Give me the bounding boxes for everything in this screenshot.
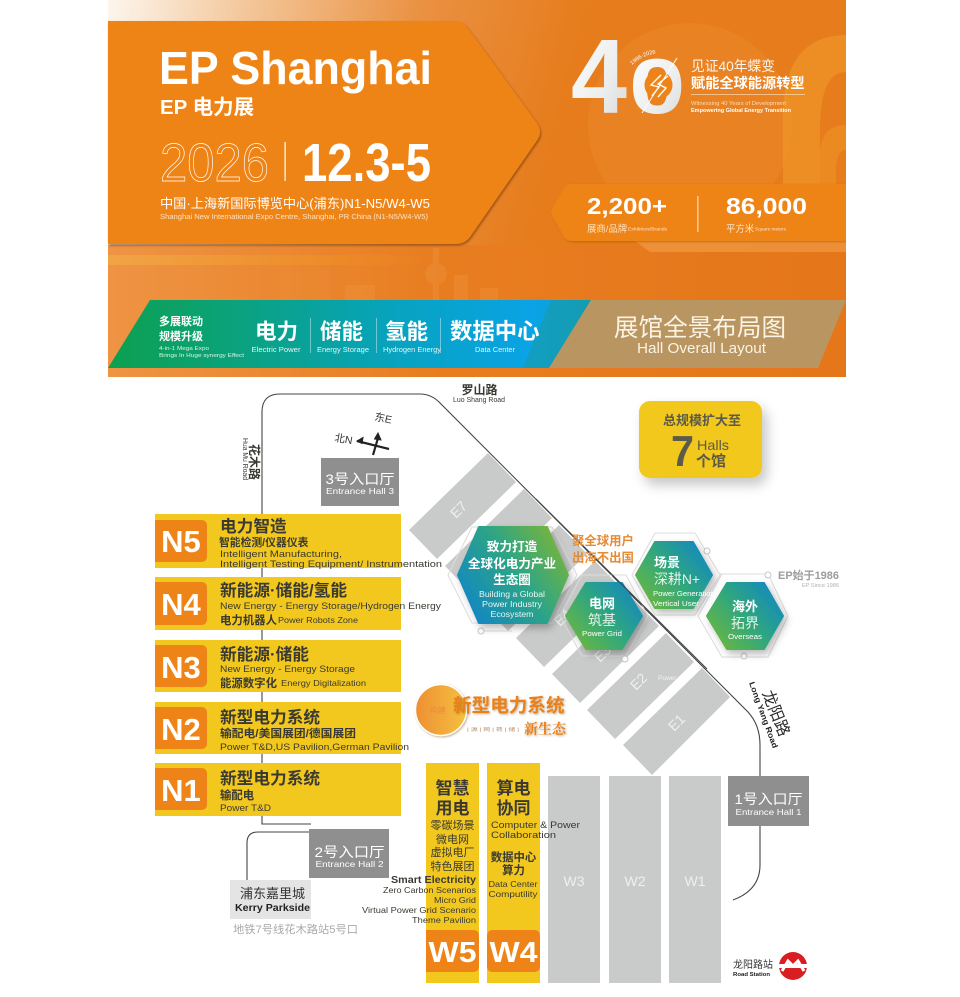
Kerry Parkside: [230, 880, 311, 919]
since 1986 note: EP始于1986: [778, 568, 839, 582]
date divider: [284, 142, 286, 181]
hexagon: global power ecosystem: 全球化电力产业: [468, 556, 556, 571]
hall N2: [155, 702, 409, 754]
logo zero: 0: [629, 43, 685, 130]
stat: exhibitors: Exhibitors/Brands: [628, 226, 668, 232]
expo: energy storage: Energy Storage: [317, 347, 369, 354]
halls W3 W2 W1: W3: [564, 873, 585, 889]
hall N4: [155, 577, 441, 630]
venue Chinese: 中国·上海新国际博览中心(浦东)N1-N5/W4-W5: [160, 196, 430, 211]
hall N3: N3: [161, 650, 201, 685]
compass: 北N: [333, 432, 353, 447]
hall W5: Theme Pavilion: [412, 915, 476, 925]
logo digits: 4: [571, 18, 627, 136]
hall W5: 特色展团: [430, 859, 474, 873]
hall N2: N2: [161, 712, 201, 747]
road label: Huamu Road: 花木路: [247, 444, 262, 480]
road label: Huamu Road: [241, 438, 262, 480]
new power system emblem: 新型电力系统: [453, 695, 565, 716]
banner: four expos: [108, 300, 846, 368]
road label: Longyang Road: [747, 681, 793, 750]
hall N1: Power T&D: [220, 803, 271, 814]
slogan line one: 见证40年蝶变: [691, 58, 775, 74]
since 1986 note: [778, 568, 839, 589]
hall N3: 新能源·储能: [220, 644, 309, 664]
hexagon: overseas: 拓界: [731, 615, 759, 631]
entrance hall 2: [309, 829, 389, 878]
stats band: [551, 184, 860, 252]
hexagon: power grid: [566, 583, 642, 649]
expo: data center: Data Center: [475, 347, 516, 354]
expo: electric power: [252, 320, 301, 354]
metro note: 地铁7号线花木路站5号口: [233, 922, 358, 936]
hexagon: global power ecosystem: [458, 527, 568, 623]
hall W4: 协同: [496, 799, 530, 818]
stat: exhibitors: 2,200+: [587, 193, 667, 219]
hexagon: scenario: Power Generation/: [653, 589, 717, 598]
hall N5: 智能检测/仪器仪表: [219, 535, 309, 549]
hall N4: Power Robots Zone: [278, 615, 358, 625]
E halls: E2: [627, 670, 650, 693]
entrance hall 1: [728, 776, 809, 826]
callout: seven halls: 7: [671, 427, 694, 476]
main arrow panel: [108, 21, 540, 244]
layout title Chinese: 展馆全景布局图: [614, 314, 786, 342]
road label: Luoshan Road: 罗山路: [461, 382, 498, 397]
hall W5: 微电网: [436, 832, 469, 846]
hall N1: [155, 763, 401, 816]
hexagon: global power ecosystem: Power Industry: [482, 599, 543, 609]
road label: Longyang Road: 龙阳路: [758, 688, 793, 739]
year outline: 2026: [160, 133, 269, 193]
hall W5: 零碳场景: [430, 818, 474, 832]
expo: electric power: Electric Power: [252, 347, 301, 354]
banner tagline: 多展联动: [159, 314, 203, 328]
expo: data center: 数据中心: [450, 319, 540, 344]
hall N1: 新型电力系统: [220, 768, 320, 788]
hexagon: overseas: Overseas: [728, 632, 762, 641]
stat: exhibitors: 展商/品牌: [587, 223, 627, 234]
road label: Luoshan Road: Luo Shang Road: [453, 397, 505, 404]
tagline: global users: [572, 533, 634, 565]
Kerry Parkside: Kerry Parkside: [235, 903, 310, 914]
stat: square meters: Square meters: [755, 226, 787, 232]
banner tagline: 规模升级: [159, 329, 203, 343]
hall N5: Intelligent Testing Equipment/ Instrumentation: [220, 559, 442, 570]
callout: seven halls: Halls: [697, 437, 729, 453]
hexagon: scenario: Vertical User: [653, 599, 700, 608]
hall N5: 电力智造: [220, 516, 287, 536]
banner tagline: 4-in-1 Mega Expo: [159, 346, 209, 352]
new power system emblem: 新生态: [524, 719, 567, 739]
entrance hall 1: Entrance Hall 1: [736, 807, 802, 817]
hexagon: scenario: 深耕N+: [654, 571, 700, 587]
hexagon: global power ecosystem: 致力打造: [487, 539, 538, 554]
hall W5: Micro Grid: [434, 895, 476, 905]
hall N3: 能源数字化: [220, 676, 278, 690]
hexagon: global power ecosystem: Ecosystem: [490, 609, 534, 619]
hall N3: Energy Digitalization: [281, 678, 366, 688]
hall W5: 虚拟电厂: [430, 845, 474, 859]
hexagon: overseas: 海外: [732, 599, 758, 614]
hall W4: W4: [490, 937, 538, 969]
Longyang Road station: 龙阳路站: [733, 958, 773, 971]
hall N4: 新能源·储能/氢能: [220, 580, 347, 600]
stat divider: [697, 196, 699, 232]
hall W5: [362, 763, 479, 983]
callout: seven halls: [639, 401, 762, 478]
callout: seven halls: 总规模扩大至: [663, 413, 741, 428]
stat: square meters: 86,000: [726, 193, 807, 219]
hall N4: 电力机器人: [220, 613, 278, 627]
new power system emblem: [416, 684, 567, 739]
hexagon: scenario: 场景: [654, 555, 680, 570]
road label: Longyang Road: Long Yang Road: [747, 681, 780, 750]
40th anniversary logo: [571, 18, 805, 136]
entrance hall 2: 2号入口厅: [314, 844, 384, 860]
road network: [247, 394, 760, 900]
expo: hydrogen energy: 氢能: [385, 319, 428, 344]
slogan rule: [691, 93, 805, 96]
header background: [108, 0, 846, 377]
since 1986 note: EP Since 1986: [802, 583, 839, 589]
hall W5: W5: [428, 937, 476, 969]
E halls: E7: [447, 498, 470, 521]
tan title panel: [549, 300, 846, 368]
hall W4: Data Center: [488, 879, 538, 889]
expo: energy storage: [317, 320, 369, 354]
entrance hall 3: 3号入口厅: [326, 471, 394, 487]
hall N2: 新型电力系统: [220, 707, 320, 727]
new power system emblem: 构建: [430, 705, 446, 715]
E halls: E4: [551, 606, 574, 629]
tagline: global users: 出海不出国: [572, 550, 634, 565]
subtitle: EP power show: EP 电力展: [160, 96, 254, 119]
hall W5: Smart Electricity: [391, 875, 476, 886]
layout title English: Hall Overall Layout: [637, 340, 767, 357]
slogan English: Witnessing 40 Years of Development: [691, 101, 787, 107]
E halls: E1: [665, 711, 688, 734]
stat: exhibitors: [587, 198, 667, 233]
title: EP Shanghai: EP Shanghai: [159, 42, 432, 94]
E halls: E3: [591, 642, 614, 665]
venue English: Shanghai New International Expo Centre, Shanghai, PR China (N1-N5/W4-W5): [160, 212, 428, 221]
hall W4: Computility: [488, 889, 538, 899]
hall W4: Collaboration: [491, 830, 556, 840]
compass: [333, 410, 393, 455]
date: 12.3-5: [302, 133, 431, 193]
tagline: global users: 聚全球用户: [572, 533, 634, 548]
hall N3: [155, 640, 401, 692]
icon: Shanghai metro: [778, 952, 808, 980]
road label: Luoshan Road: [453, 382, 505, 404]
hall N1: 输配电: [220, 788, 255, 802]
new power system emblem: | 源 | 网 | 荷 | 储 |: [467, 726, 519, 733]
hall N4: N4: [161, 587, 202, 622]
logo years: 1986-2026: [630, 50, 656, 65]
compass: 东E: [373, 410, 393, 427]
halls W3 W2 W1: W2: [624, 873, 646, 889]
hexagon: global power ecosystem: 生态圈: [493, 572, 531, 587]
hall W4: [487, 763, 580, 983]
slogan line two: 赋能全球能源转型: [691, 75, 805, 92]
hexagon: power grid: 筑基: [588, 612, 616, 628]
halls W3 W2 W1: [548, 776, 721, 983]
banner tagline: Brings In Huge synergy Effect: [159, 353, 245, 359]
hexagon: scenario: [636, 542, 717, 608]
hall N3: New Energy - Energy Storage: [220, 664, 355, 675]
hall N5: N5: [161, 524, 201, 559]
hall W4: Computer & Power: [491, 820, 580, 830]
hall N2: 输配电/美国展团/德国展团: [220, 726, 356, 740]
hall N4: New Energy - Energy Storage/Hydrogen Energy: [220, 601, 441, 612]
hall W5: 智慧: [436, 778, 470, 798]
entrance hall 3: Entrance Hall 3: [326, 486, 394, 496]
road segment over hexagons: [536, 499, 707, 669]
entrance hall 1: 1号入口厅: [734, 791, 802, 807]
hall W4: 算力: [502, 863, 525, 877]
Longyang Road station: [733, 952, 808, 980]
expo: energy storage: 储能: [320, 320, 363, 344]
stat: square meters: [726, 198, 806, 233]
hexagon: overseas: [707, 583, 783, 649]
Longyang Road station: Road Station: [733, 972, 770, 978]
stat: square meters: 平方米: [726, 223, 755, 234]
expo: electric power: 电力: [255, 320, 298, 344]
hexagon connector lines: [448, 527, 788, 662]
road label: Huamu Road: Hua Mu Road: [241, 438, 248, 480]
hall N5: [155, 514, 442, 570]
E halls: Power: [658, 675, 677, 682]
slogan English bold: Empowering Global Energy Transition: [691, 108, 791, 114]
hall W4: 数据中心: [491, 850, 537, 864]
hexagon: power grid: Power Grid: [582, 629, 622, 638]
E halls: [409, 453, 730, 775]
entrance hall 3: [321, 458, 399, 506]
hall N1: N1: [161, 773, 201, 808]
callout: seven halls: 个馆: [696, 452, 726, 470]
banner tagline: [159, 314, 245, 359]
hall W4: 算电: [496, 778, 530, 798]
Kerry Parkside: 浦东嘉里城: [240, 886, 305, 901]
halls W3 W2 W1: W1: [684, 873, 706, 889]
hall W5: 用电: [436, 799, 470, 818]
hall N2: Power T&D,US Pavilion,German Pavilion: [220, 742, 409, 753]
hexagon: power grid: 电网: [589, 596, 615, 611]
hall W5: Virtual Power Grid Scenario: [362, 905, 476, 915]
hall N5: Intelligent Manufacturing,: [220, 549, 342, 560]
entrance hall 2: Entrance Hall 2: [316, 859, 384, 869]
hexagon: global power ecosystem: Building a Global: [479, 589, 545, 599]
expo: hydrogen energy: Hydrogen Energy: [383, 347, 442, 354]
expo: hydrogen energy: [383, 319, 442, 354]
hall W5: Zero Carbon Scenarios: [383, 885, 476, 895]
